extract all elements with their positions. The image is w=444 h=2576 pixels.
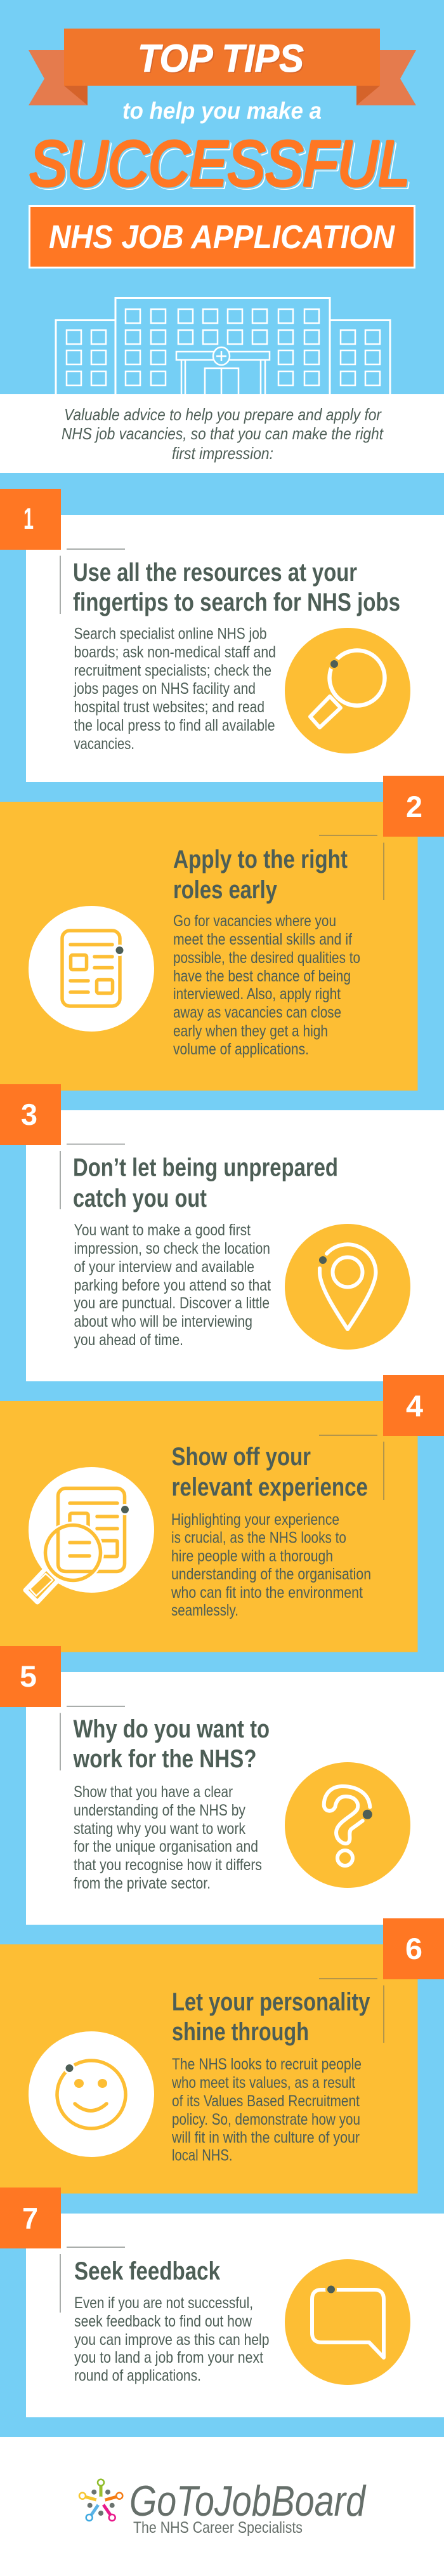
icon: document under magnifying glass [25,1467,154,1602]
body text 2 [173,912,360,1058]
body text 5: understanding of the NHS by [74,1802,245,1819]
title: successful: SUCCESSFUL [29,128,410,199]
title box: NHS job application [29,206,415,268]
body text 2: have the best chance of being [173,967,351,985]
heading 6 [172,1988,370,2046]
body text 6: will fit in with the culture of your [171,2129,360,2147]
body text 1: Search specialist online NHS job [74,625,266,642]
body text 4: who can fit into the environment [171,1584,363,1602]
heading 6: shine through [172,2018,309,2046]
panel: tip 6 [0,1918,444,2194]
logo wordmark: GoToJobBoard [129,2477,367,2525]
heading 3 [73,1154,338,1212]
number badge 3: 3 [21,1098,37,1131]
body text 3: you ahead of time. [74,1331,183,1349]
number badge 6 [383,1918,444,1979]
number badge 4: 4 [406,1389,423,1423]
number badge 7 [0,2188,61,2248]
panel: tip 2 [0,776,444,1091]
intro panel: NHS job vacancies, so that you can make the right [62,424,384,443]
body text 5 [74,1783,262,1892]
number badge 5: 5 [20,1659,37,1693]
body text 7 [74,2294,269,2384]
body text 2: away as vacancies can close [173,1004,341,1021]
body text 4: hire people with a thorough [171,1548,333,1565]
body text 6: who meet its values, as a result [171,2074,355,2092]
body text 7: seek feedback to find out how [74,2313,252,2330]
icon: location pin [285,1224,410,1350]
body text 3: of your interview and available [74,1258,254,1276]
body text 5: stating why you want to work [74,1820,245,1838]
body text 5: that you recognise how it differs [74,1856,262,1874]
icon: document [29,906,154,1032]
icon: question mark [285,1762,410,1888]
number badge 3 [0,1084,61,1145]
body text 2: possible, the desired qualities to [173,949,360,967]
heading 5 [73,1715,270,1773]
intro panel: Valuable advice to help you prepare and apply for [64,405,382,424]
body text 6: local NHS. [172,2147,232,2165]
body text 2: Go for vacancies where you [173,912,336,930]
heading 2: roles early [173,876,278,904]
icon: magnifying glass [285,628,410,754]
heading 2: Apply to the right [173,846,348,873]
body text 2: interviewed. Also, apply right [173,985,341,1003]
icon: hospital building [56,298,390,397]
body text 2: meet the essential skills and if [173,931,352,948]
title box: NHS job application: NHS JOB APPLICATION [49,219,395,256]
body text 3: You want to make a good first [74,1221,251,1239]
body text 6: The NHS looks to recruit people [172,2055,362,2073]
number badge 7: 7 [22,2201,38,2235]
body text 4: seamlessly. [171,1602,238,1619]
body text 1: the local press to find all available [74,717,275,734]
body text 1: recruitment specialists; check the [74,661,271,679]
body text 3 [74,1221,271,1349]
panel: tip 1 [0,489,444,782]
subtitle: to help you make a: to help you make a [122,98,322,124]
number badge 5 [0,1646,61,1707]
heading 1 [73,559,400,616]
body text 1: vacancies. [74,735,134,753]
body text 5: for the unique organisation and [74,1838,258,1856]
body text 4: understanding of the organisation [171,1565,371,1583]
intro panel [0,394,444,473]
number badge 2 [383,776,444,837]
body text 5: from the private sector. [74,1875,211,1892]
banner: top tips ribbon: TOP TIPS [138,37,304,80]
body text 3: parking before you attend so that [74,1277,271,1294]
number badge 2: 2 [406,790,422,823]
body text 7: you to land a job from your next [74,2349,263,2367]
body text 2: early when they get a high [173,1022,328,1040]
heading 7: Seek feedback [74,2257,221,2285]
body text 7: round of applications. [74,2367,201,2384]
panel: tip 5 [0,1646,444,1925]
panel: tip 3 [0,1084,444,1381]
body text 2: volume of applications. [173,1040,309,1058]
icon: speech bubble [285,2259,410,2385]
logo mark [79,2480,122,2521]
heading 4: Show off your [171,1443,311,1471]
banner: top tips ribbon: TOP TIPS [139,38,305,81]
heading 4 [171,1443,368,1501]
banner: top tips ribbon [29,29,416,105]
heading 4: relevant experience [171,1473,368,1501]
heading 3: catch you out [73,1185,207,1212]
logo tagline: The NHS Career Specialists [133,2519,303,2537]
body text 1 [74,625,276,753]
body text 3: about who will be interviewing [74,1313,252,1331]
icon: smiley face [29,2031,154,2157]
number badge 6: 6 [405,1932,422,1965]
body text 4 [171,1511,371,1619]
body text 3: impression, so check the location [74,1240,270,1258]
body text 4: Highlighting your experience [171,1511,339,1529]
number badge 1 [0,489,61,550]
body text 1: boards; ask non-medical staff and [74,644,276,661]
body text 5: Show that you have a clear [74,1783,233,1801]
body text 1: jobs pages on NHS facility and [74,680,256,698]
body text 6 [171,2055,362,2165]
heading 1: Use all the resources at your [73,559,357,587]
heading 3: Don’t let being unprepared [73,1154,338,1182]
body text 1: hospital trust websites; and read [74,698,264,716]
intro panel: first impression: [172,444,273,463]
heading 6: Let your personality [172,1988,370,2016]
body text 7: you can improve as this can help [74,2331,269,2349]
body text 4: is crucial, as the NHS looks to [171,1529,346,1546]
body text 6: policy. So, demonstrate how you [172,2111,360,2128]
panel: tip 4 [0,1375,444,1652]
body text 3: you are punctual. Discover a little [74,1294,270,1312]
body text 7: Even if you are not successful, [74,2294,253,2312]
number badge 4 [383,1375,444,1436]
heading 5: Why do you want to [74,1715,270,1743]
heading 5: work for the NHS? [73,1745,257,1773]
number badge 1: 1 [23,501,34,535]
logo: GoToJobBoard [79,2477,367,2537]
body text 6: of its Values Based Recruitment [172,2092,360,2110]
heading 2 [173,846,348,904]
panel: tip 7 [0,2188,444,2417]
